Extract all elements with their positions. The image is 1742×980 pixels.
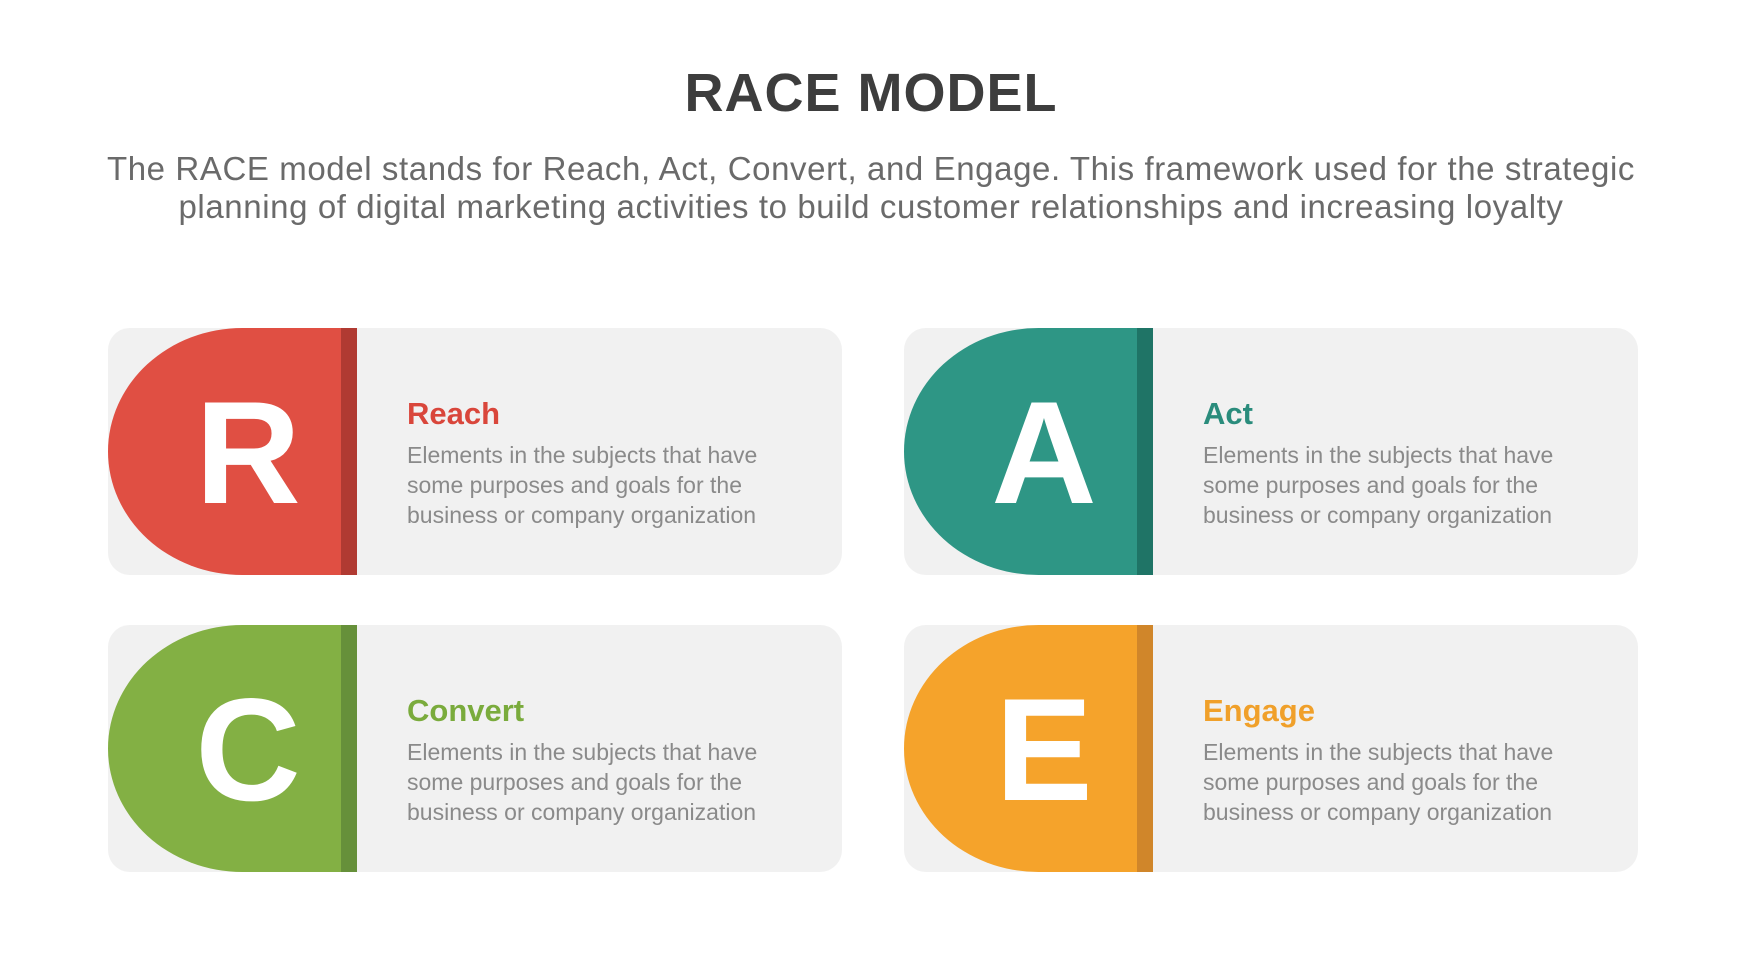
text: act [1203, 442, 1553, 528]
text: reach [407, 442, 757, 528]
text: engage: business or company organization [1203, 799, 1552, 825]
tab: C [108, 625, 357, 872]
subtitle: planning of digital marketing activities to build customer relationships and increasing loyalty [178, 188, 1564, 225]
heading: convert: Convert [407, 693, 524, 728]
text: engage [1203, 739, 1553, 825]
tab: E [904, 625, 1153, 872]
text: convert: Elements in the subjects that have [407, 739, 757, 765]
text: reach: Elements in the subjects that have [407, 442, 757, 468]
tab: E: E [995, 668, 1093, 831]
text: act: some purposes and goals for the [1203, 472, 1538, 498]
text: convert [407, 739, 757, 825]
text: act: Elements in the subjects that have [1203, 442, 1553, 468]
panel: convert [108, 625, 842, 872]
heading: reach: Reach [407, 396, 500, 431]
tab: A [904, 328, 1153, 575]
text: reach: some purposes and goals for the [407, 472, 742, 498]
panel: act [904, 328, 1638, 575]
text: engage: some purposes and goals for the [1203, 769, 1538, 795]
subtitle: The RACE model stands for Reach, Act, Convert, and Engage. This framework used for the strategic [107, 150, 1635, 187]
heading: act: Act [1203, 396, 1253, 431]
tab: R: R [195, 371, 301, 534]
text: convert: business or company organization [407, 799, 756, 825]
text: engage: Elements in the subjects that have [1203, 739, 1553, 765]
tab: C: C [195, 668, 301, 831]
heading: engage: Engage [1203, 693, 1315, 728]
title: RACE MODEL [684, 63, 1058, 123]
text: act: business or company organization [1203, 502, 1552, 528]
panel: reach [108, 328, 842, 575]
subtitle [107, 150, 1635, 225]
text: reach: business or company organization [407, 502, 756, 528]
text: convert: some purposes and goals for the [407, 769, 742, 795]
panel: engage [904, 625, 1638, 872]
tab: A: A [991, 371, 1097, 534]
tab: R [108, 328, 357, 575]
